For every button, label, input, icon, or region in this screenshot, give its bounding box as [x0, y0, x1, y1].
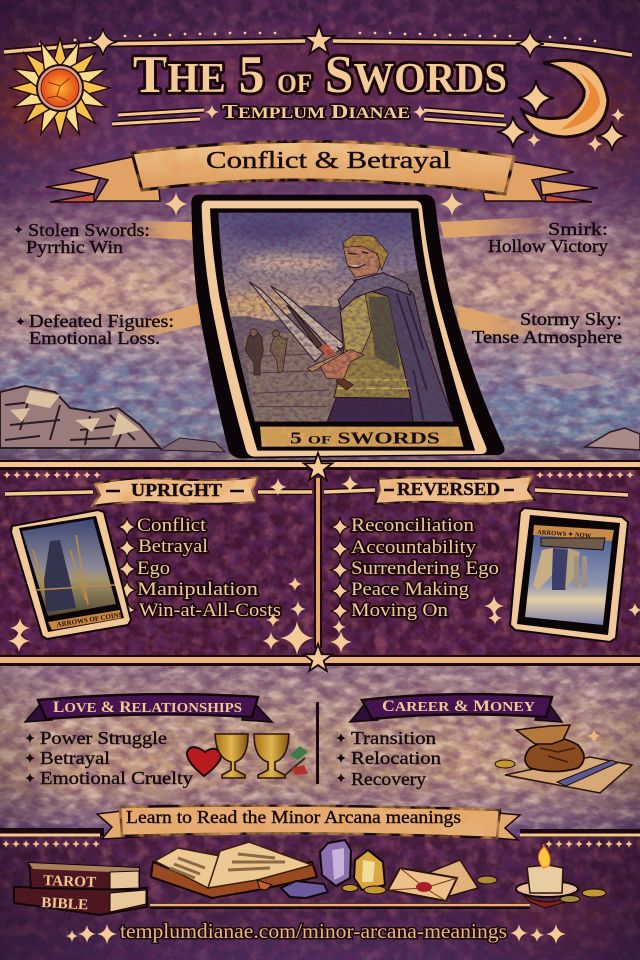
man: face — [343, 246, 380, 278]
icon: candle — [516, 845, 606, 908]
icon: tarot and bible books: BIBLE — [41, 895, 89, 913]
upright list: Conflict — [137, 515, 207, 536]
love and relationships banner: LOVE & RELATIONSHIPS — [53, 699, 242, 716]
icon: crescent moon — [497, 60, 627, 152]
learn banner — [0, 806, 640, 840]
swords — [249, 281, 344, 362]
man: hair — [342, 235, 388, 270]
callout: smirk: Smirk: — [548, 219, 608, 239]
top ornamental divider — [4, 25, 632, 58]
rocks right — [520, 372, 640, 450]
banner: conflict and betrayal — [46, 141, 598, 202]
star rows under divider — [3, 471, 634, 479]
reversed list — [330, 515, 499, 621]
icon: crystals — [281, 840, 386, 898]
vertical divider low — [316, 702, 319, 784]
icon: rose sprig — [284, 746, 308, 776]
love list: Betrayal — [40, 748, 110, 768]
callout: stormy sky: Stormy Sky: — [520, 309, 622, 329]
reversed banner — [324, 476, 628, 504]
love list: Power Struggle — [40, 728, 167, 748]
callout: stolen swords: Stolen Swords: — [28, 220, 150, 240]
reversed list: Reconciliation — [351, 515, 475, 536]
upper section divider — [0, 453, 640, 480]
title: THE 5 OF SWORDS — [133, 46, 507, 104]
decorative star cluster: upright — [8, 478, 314, 655]
learn banner: Learn to Read the Minor Arcana meanings — [126, 807, 461, 827]
love list — [25, 728, 193, 788]
callout: smirk — [488, 219, 608, 256]
upright list: Manipulation — [137, 579, 259, 600]
icon: goblets — [215, 734, 289, 778]
defeated figures — [245, 329, 287, 375]
upright list: Ego — [137, 558, 170, 579]
subtitle: TEMPLUM DIANAE — [222, 101, 410, 123]
icon: tarot and bible books: TAROT — [43, 873, 96, 891]
banner: conflict and betrayal: Conflict & Betrayal — [206, 148, 451, 174]
website url: templumdianae.com/minor-arcana-meanings — [120, 919, 507, 943]
callout: defeated figures: Emotional Loss. — [29, 328, 160, 348]
main tarot card: 5 of swords — [191, 195, 505, 458]
subtitle — [112, 101, 506, 125]
upright list: Betrayal — [138, 536, 208, 557]
small card: upright — [11, 510, 131, 639]
lower section divider — [0, 644, 640, 671]
career list: Recovery — [351, 769, 426, 789]
reversed list: Moving On — [351, 600, 449, 621]
love and relationships banner — [25, 694, 272, 722]
icon: sealed envelope — [388, 860, 497, 901]
small card: reversed — [510, 508, 628, 642]
career list — [336, 728, 441, 789]
man: legs — [327, 397, 413, 423]
card title plate: 5 OF SWORDS — [290, 428, 440, 447]
icon: coin bag, letter and quill — [495, 725, 632, 793]
decorative dotted rows — [2, 840, 633, 848]
hand and hilt — [307, 353, 344, 372]
reversed banner: REVERSED — [397, 479, 500, 499]
callout: stormy sky — [472, 309, 622, 347]
career list: Transition — [351, 728, 436, 748]
small card: reversed: ARROWS ✦ NOW — [537, 528, 592, 540]
man: hood — [338, 273, 411, 310]
decorative banner strips: left callouts — [110, 221, 200, 340]
callout: stolen swords: Pyrrhic Win — [26, 237, 123, 257]
callout: stormy sky: Tense Atmosphere — [472, 327, 622, 347]
upright banner — [5, 477, 312, 506]
upright banner: UPRIGHT — [131, 480, 222, 500]
decorative banner strips: right callouts — [440, 216, 560, 338]
callout: stolen swords — [14, 220, 150, 257]
reversed list: Surrendering Ego — [351, 558, 499, 579]
upright list — [117, 515, 281, 621]
callout: defeated figures: Defeated Figures: — [29, 311, 174, 331]
icon: tarot and bible books — [14, 863, 147, 915]
man: cloak — [353, 277, 455, 423]
upright list: Win-at-All-Costs — [139, 600, 281, 621]
decorative star cluster: reversed — [330, 475, 640, 653]
man: tunic — [334, 290, 411, 398]
icon: open book — [151, 842, 317, 898]
central vertical divider — [314, 478, 322, 648]
reversed list: Peace Making — [351, 579, 470, 600]
table edge line — [150, 903, 530, 909]
career and money banner: CAREER & M ONEY — [382, 698, 535, 715]
small card: upright: ARROWS OF COINS — [56, 611, 123, 629]
career and money banner — [350, 694, 562, 722]
icon: sun — [10, 38, 110, 138]
love list: Emotional Cruelty — [40, 768, 193, 788]
reversed list: Accountability — [351, 537, 477, 558]
card artwork — [213, 210, 460, 423]
rocks left — [0, 386, 225, 452]
card title plate — [260, 427, 463, 447]
icon: heart — [187, 747, 221, 776]
callout: smirk: Hollow Victory — [488, 236, 608, 256]
callout: defeated figures — [16, 311, 174, 348]
career list: Relocation — [351, 748, 441, 768]
